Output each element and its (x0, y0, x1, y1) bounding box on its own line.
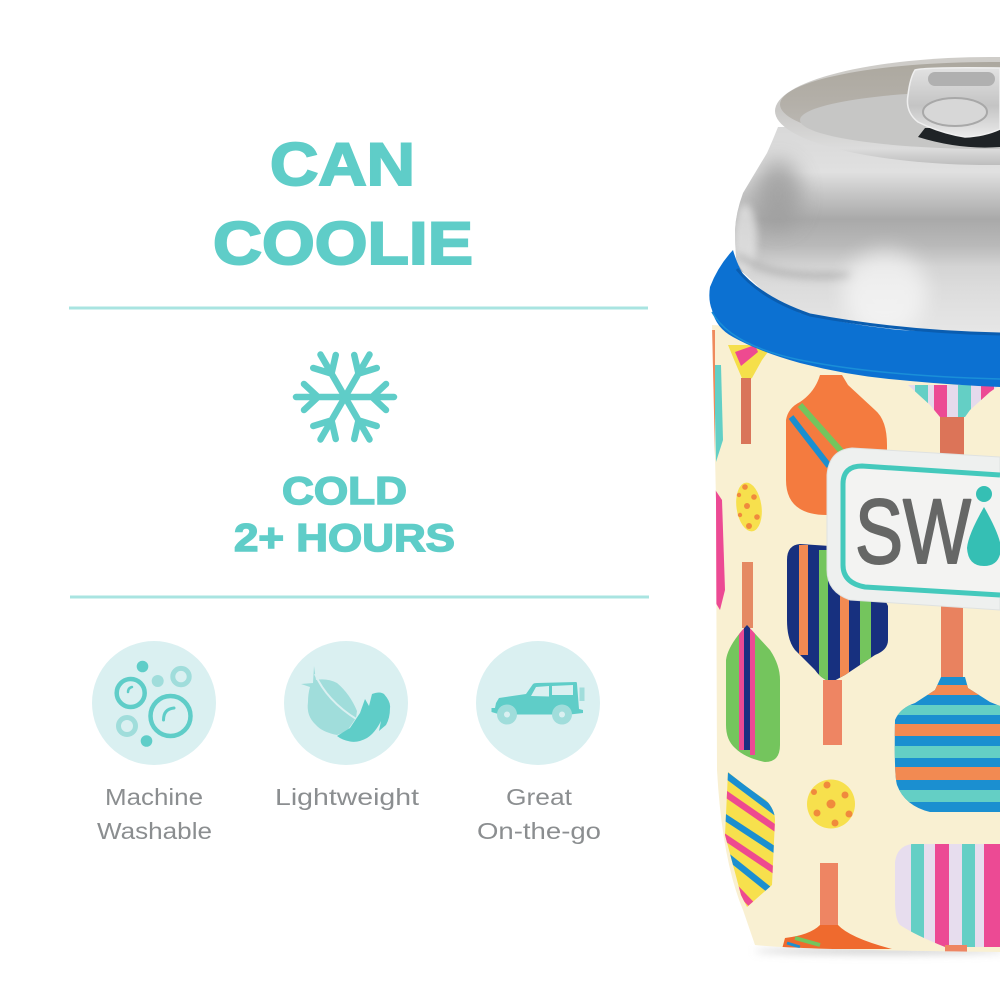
shadow under coolie (755, 948, 1000, 954)
label: great on-the-go: On-the-go (477, 818, 601, 844)
label: machine washable: Machine (105, 784, 203, 810)
title (213, 131, 473, 277)
paddle: blue striped (890, 675, 1000, 815)
label: lightweight: Lightweight (275, 784, 420, 810)
paddle: navy striped (780, 540, 890, 745)
paddle: yellow striped (725, 772, 775, 907)
blue collar (709, 250, 1000, 387)
coolie body (700, 320, 1000, 960)
swig logo patch: SW (855, 481, 971, 583)
heading: cold 2+ hours (234, 470, 455, 560)
paddle: striped top-right (908, 385, 997, 417)
aluminium can (735, 57, 1000, 332)
label: great on-the-go: Great (506, 784, 573, 810)
ball (736, 482, 762, 532)
ball (807, 780, 855, 828)
heading: cold 2+ hours: COLD (282, 470, 407, 513)
title: CAN (270, 131, 415, 198)
icon: snowflake (296, 348, 394, 446)
title: COOLIE (213, 210, 473, 277)
edge slivers (715, 365, 723, 462)
label: machine washable: Washable (97, 818, 212, 844)
icon: lightweight feather (284, 641, 408, 765)
paddle: pale striped (890, 840, 1000, 953)
paddle: green (726, 562, 780, 762)
label: machine washable (97, 784, 212, 844)
icon: jeep (476, 641, 600, 765)
label: great on-the-go (477, 784, 601, 844)
heading: cold 2+ hours: 2+ HOURS (234, 517, 455, 560)
icon: machine washable bubbles (92, 641, 216, 765)
product: can in coolie (700, 57, 1000, 960)
paddle: orange (786, 375, 887, 520)
paddle: small top-left (728, 345, 768, 444)
swig logo patch (827, 448, 1000, 610)
handle below patch (941, 605, 963, 680)
paddle: orange bottom (782, 863, 892, 949)
